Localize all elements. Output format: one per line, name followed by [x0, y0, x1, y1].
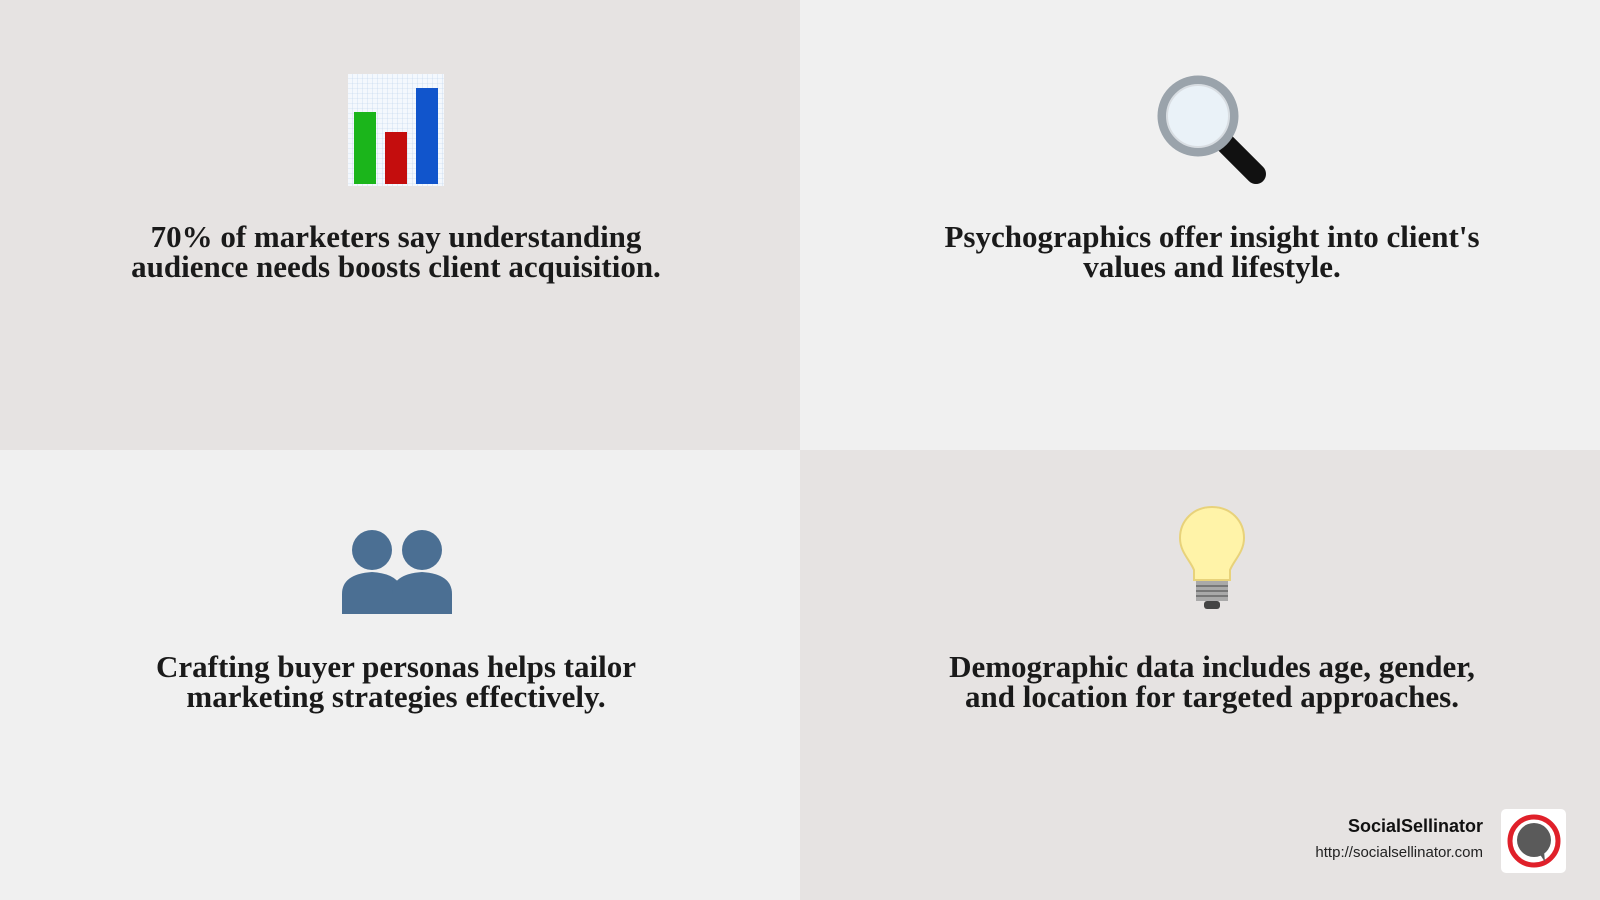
brand block: [1315, 809, 1566, 873]
panel: top-left: [0, 0, 800, 450]
text: bottom-right: Demographic data includes age, gender,: [949, 649, 1475, 684]
brand name: SocialSellinator: [1348, 816, 1483, 836]
brand url: http://socialsellinator.com: [1315, 844, 1483, 861]
text: top-right: Psychographics offer insight into client's: [944, 219, 1480, 254]
text: top-left: [131, 219, 661, 284]
panel: bottom-right: [800, 450, 1600, 900]
icon: magnifier: [1158, 76, 1266, 184]
panel: bottom-left: [0, 450, 800, 900]
icon: light bulb: [1179, 506, 1245, 609]
text: bottom-right: and location for targeted approaches.: [965, 679, 1459, 714]
icon: logo: [1501, 809, 1566, 873]
icon: bar chart: [348, 74, 444, 186]
text: bottom-left: marketing strategies effectively.: [186, 679, 606, 714]
text: bottom-left: [156, 649, 636, 714]
text: bottom-left: Crafting buyer personas helps tailor: [156, 649, 636, 684]
icon: people: [342, 530, 452, 614]
text: bottom-right: [949, 649, 1475, 714]
text: top-right: [944, 219, 1480, 284]
text: top-left: audience needs boosts client acquisition.: [131, 249, 661, 284]
text: top-right: values and lifestyle.: [1083, 249, 1341, 284]
text: top-left: 70% of marketers say understanding: [151, 219, 641, 254]
panel: top-right: [800, 0, 1600, 450]
